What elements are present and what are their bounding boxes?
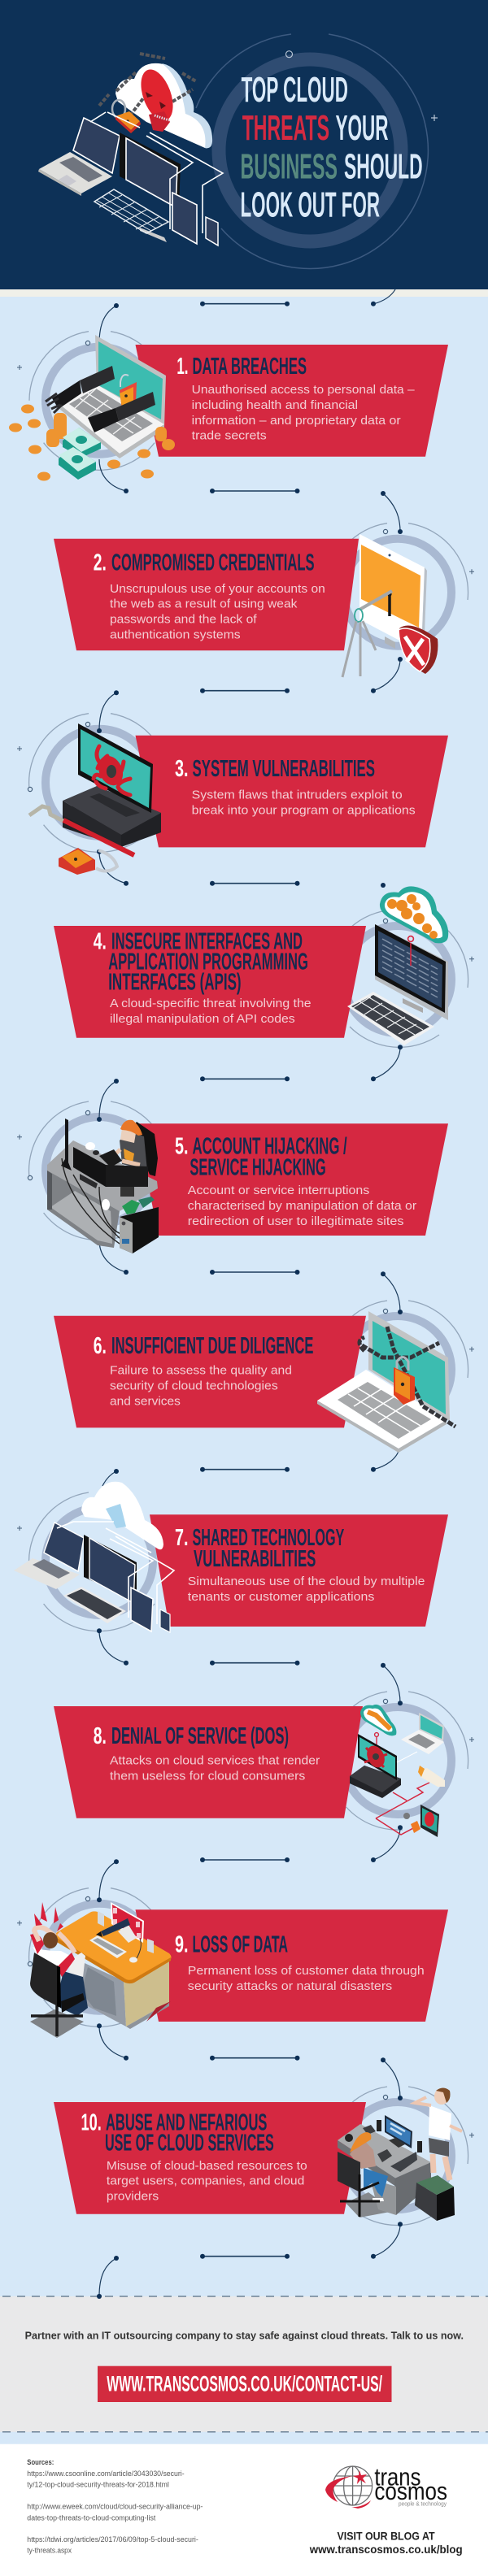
icon: chained laptop xyxy=(317,1311,455,1453)
footer panel xyxy=(0,2444,488,2576)
ring xyxy=(344,2087,474,2226)
heading: 6. xyxy=(94,1333,107,1359)
red monitor xyxy=(111,1902,144,1943)
section 7: shared technology vulnerabilities xyxy=(14,1469,448,1666)
call to action text: Partner with an IT outsourcing company to stay safe against cloud threats. Talk to us now. xyxy=(25,2330,464,2342)
section 9: loss of data xyxy=(17,1859,448,2061)
desktop xyxy=(54,1911,171,1982)
connectors xyxy=(97,1469,299,1666)
banner xyxy=(54,539,359,650)
heading xyxy=(81,2110,274,2157)
description: including health and financial xyxy=(192,398,358,412)
ring xyxy=(344,1301,474,1423)
laptop xyxy=(390,2152,417,2172)
plant and parts xyxy=(122,1200,140,1214)
description xyxy=(188,1575,425,1604)
title: THREATS xyxy=(242,109,329,148)
description xyxy=(110,582,325,642)
description: Account or service interruptions xyxy=(188,1184,369,1197)
description xyxy=(192,383,415,442)
ring xyxy=(344,1692,474,1830)
ring xyxy=(17,714,155,852)
description: and services xyxy=(110,1394,181,1408)
description: target users, companies, and cloud xyxy=(107,2174,304,2188)
chair xyxy=(30,2009,84,2038)
ring xyxy=(344,523,474,646)
description: information – and proprietary data or xyxy=(192,414,401,428)
heading xyxy=(175,1931,288,1957)
description: trade secrets xyxy=(192,428,267,442)
description xyxy=(110,997,312,1026)
description: redirection of user to illegitimate sites xyxy=(188,1214,403,1228)
sources: http://www.eweek.com/cloud/cloud-security-alliance-up- xyxy=(27,2503,203,2512)
connectors xyxy=(200,883,403,1081)
tablet xyxy=(172,193,197,244)
desktop monitor xyxy=(120,132,181,242)
blog link: www.transcosmos.co.uk/blog xyxy=(309,2543,463,2556)
contact button xyxy=(98,2366,392,2402)
heading: 4. xyxy=(94,928,107,954)
connectors xyxy=(200,1663,403,1862)
heading: 10. xyxy=(81,2110,102,2136)
wired keyboard xyxy=(94,189,168,233)
heading xyxy=(94,550,315,576)
description: Unauthorised access to personal data – xyxy=(192,383,415,397)
description: tenants or customer applications xyxy=(188,1590,374,1604)
section 6: insufficient due diligence xyxy=(54,1271,474,1472)
heading xyxy=(94,928,308,995)
stress marks xyxy=(34,1902,63,1931)
ring xyxy=(17,1888,155,2026)
connectors xyxy=(200,1271,403,1472)
heading: DATA BREACHES xyxy=(192,354,307,380)
description: illegal manipulation of API codes xyxy=(110,1012,295,1026)
final connector xyxy=(97,2256,119,2299)
chair xyxy=(338,2152,360,2192)
connector from header xyxy=(200,289,395,306)
globe xyxy=(333,2466,373,2505)
cloud xyxy=(115,63,211,148)
heading: 9. xyxy=(175,1931,189,1957)
sources: Sources: xyxy=(27,2458,54,2466)
logo: people & technology xyxy=(399,2502,447,2507)
description xyxy=(192,788,416,818)
section 10: abuse and nefarious use xyxy=(54,2057,474,2259)
section 5: account hijacking xyxy=(17,1079,448,1275)
logo: cosmos xyxy=(374,2477,447,2505)
ring xyxy=(17,1101,155,1240)
icon: office workers xyxy=(338,2087,462,2221)
mouse xyxy=(129,1957,137,1962)
skull xyxy=(135,65,179,132)
description: System flaws that intruders exploit to xyxy=(192,788,403,802)
description: break into your program or applications xyxy=(192,804,416,818)
heading xyxy=(94,1333,313,1359)
description: Misuse of cloud-based resources to xyxy=(107,2159,307,2173)
chair xyxy=(130,1122,158,1176)
banner xyxy=(150,1514,448,1627)
monitor xyxy=(385,2115,412,2148)
description: the web as a result of using weak xyxy=(110,597,298,611)
heading: ACCOUNT HIJACKING / xyxy=(192,1133,347,1159)
header panel xyxy=(0,0,488,297)
accessories xyxy=(377,2120,381,2131)
connectors xyxy=(200,2057,403,2259)
heading: APPLICATION PROGRAMMING xyxy=(108,949,308,975)
keyboard xyxy=(89,1935,127,1958)
icon: tablet, key and shield xyxy=(342,534,438,677)
heading xyxy=(175,1525,344,1572)
header illustration: devices and cloud xyxy=(38,54,223,245)
title: YOUR xyxy=(335,109,389,148)
seated person xyxy=(364,2168,388,2197)
sources: https://www.csoonline.com/article/3043030/securi- xyxy=(27,2470,185,2478)
ring xyxy=(17,1492,155,1631)
padlock xyxy=(112,100,141,133)
title: TOP CLOUD xyxy=(242,71,348,110)
person xyxy=(120,1132,147,1171)
sources xyxy=(27,2458,203,2556)
coins xyxy=(9,405,175,481)
heading: COMPROMISED CREDENTIALS xyxy=(111,550,314,576)
heading: 3. xyxy=(175,756,189,782)
icon: stressed worker at desk xyxy=(30,1902,171,2038)
logo xyxy=(325,2462,447,2509)
heading: SERVICE HIJACKING xyxy=(190,1155,326,1181)
network lines xyxy=(90,112,223,233)
section 2: compromised credentials xyxy=(54,491,474,693)
connectors xyxy=(200,491,403,693)
heading: 5. xyxy=(175,1133,189,1159)
description xyxy=(110,1364,292,1408)
heading: VULNERABILITIES xyxy=(194,1546,316,1572)
icon: attacked network xyxy=(350,1705,445,1837)
section 1: data breaches xyxy=(9,303,448,493)
description xyxy=(188,1964,425,1993)
title xyxy=(241,71,423,225)
banner xyxy=(135,736,448,847)
screens xyxy=(73,1147,106,1187)
title: BUSINESS xyxy=(241,147,338,186)
icon: cloud and shared devices xyxy=(14,1482,174,1632)
heading: 1. xyxy=(176,354,189,380)
heading: INTERFACES (APIS) xyxy=(108,969,242,995)
sources: dates-top-threats-to-cloud-computing-list xyxy=(27,2513,156,2522)
description xyxy=(188,1184,416,1228)
sources: https://tdwi.org/articles/2017/06/09/top-5-cloud-securi- xyxy=(27,2535,198,2544)
banknotes xyxy=(59,428,101,480)
heading: LOSS OF DATA xyxy=(192,1931,288,1957)
icon: computer with bug and crowbar xyxy=(29,723,161,875)
heading: 8. xyxy=(94,1723,107,1749)
desk xyxy=(47,1140,158,1211)
heading xyxy=(94,1723,289,1749)
speakers xyxy=(98,1911,104,1927)
header ring xyxy=(196,34,438,268)
blog link xyxy=(309,2529,463,2556)
description: security of cloud technologies xyxy=(110,1379,278,1393)
logo: trans xyxy=(374,2462,420,2491)
description: Unscrupulous use of your accounts on xyxy=(110,582,325,596)
heading: 2. xyxy=(94,550,107,576)
heading xyxy=(175,1133,347,1181)
standing woman xyxy=(433,2154,450,2180)
heading xyxy=(176,354,307,380)
description xyxy=(110,1754,320,1783)
description xyxy=(107,2159,307,2204)
heading: ABUSE AND NEFARIOUS xyxy=(106,2110,267,2136)
description: providers xyxy=(107,2190,159,2204)
description: passwords and the lack of xyxy=(110,613,257,627)
description: Simultaneous use of the cloud by multiple xyxy=(188,1575,425,1588)
sources: ty/12-top-cloud-security-threats-for-2018.html xyxy=(27,2481,169,2490)
desk xyxy=(338,2124,431,2179)
heading: INSUFFICIENT DUE DILIGENCE xyxy=(111,1333,313,1359)
description: A cloud-specific threat involving the xyxy=(110,997,312,1010)
desk base xyxy=(76,1959,126,2026)
heading: INSECURE INTERFACES AND xyxy=(111,928,303,954)
person xyxy=(59,1971,88,2016)
banner xyxy=(54,926,366,1038)
heading: 7. xyxy=(175,1525,189,1551)
connectors xyxy=(97,1859,299,2061)
description: Attacks on cloud services that render xyxy=(110,1754,320,1768)
tower xyxy=(415,2183,437,2221)
heading: DENIAL OF SERVICE (DOS) xyxy=(111,1723,289,1749)
heading: SHARED TECHNOLOGY xyxy=(192,1525,344,1551)
section 8: denial of service xyxy=(54,1663,474,1862)
heading: USE OF CLOUD SERVICES xyxy=(105,2131,274,2157)
description: authentication systems xyxy=(110,628,241,642)
description: Failure to assess the quality and xyxy=(110,1364,292,1378)
description: characterised by manipulation of data or xyxy=(188,1199,416,1213)
section 4: insecure interfaces and APIs xyxy=(54,883,474,1081)
banner xyxy=(54,1316,366,1427)
icon: hacker at desk xyxy=(47,1119,159,1253)
sources: ty-threats.aspx xyxy=(27,2547,72,2556)
ring xyxy=(344,910,474,1047)
banner xyxy=(135,1909,448,2022)
description: Permanent loss of customer data through xyxy=(188,1964,425,1978)
description: them useless for cloud consumers xyxy=(110,1770,305,1783)
connectors xyxy=(99,303,299,493)
description: security attacks or natural disasters xyxy=(188,1979,392,1993)
pc xyxy=(69,1953,85,1992)
banner xyxy=(54,1706,363,1818)
icon: monitor, cloud and keyboard xyxy=(347,886,448,1045)
ring xyxy=(17,332,155,470)
tower xyxy=(120,1207,159,1253)
call to action panel xyxy=(0,2294,488,2432)
phone xyxy=(206,217,218,245)
banner xyxy=(135,1123,448,1236)
heading xyxy=(175,756,375,782)
blog link: VISIT OUR BLOG AT xyxy=(337,2529,435,2542)
thief arm xyxy=(101,1918,130,1936)
banner xyxy=(135,345,448,457)
banner xyxy=(54,2102,366,2214)
connectors xyxy=(97,1079,299,1275)
chains xyxy=(99,54,196,115)
floor xyxy=(346,2192,394,2218)
icon: laptop with thief hands and coins xyxy=(9,335,175,481)
connectors xyxy=(97,690,299,886)
laptop xyxy=(38,118,120,196)
section 3: system vulnerabilities xyxy=(17,690,448,886)
